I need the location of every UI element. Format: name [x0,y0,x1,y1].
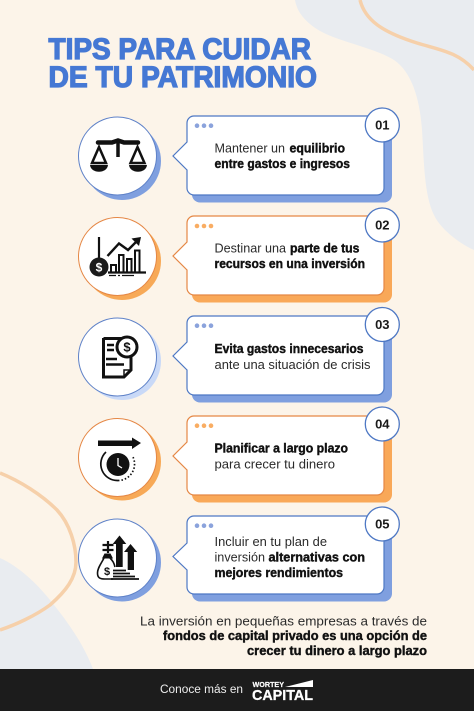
closing statement: fondos de capital privado es una opción de [163,629,427,643]
tip 5 [78,507,399,602]
title [48,33,317,94]
tip 3 text: ante una situación de crisis [214,358,370,372]
tip 2 text [214,242,365,271]
footer bar [0,669,474,711]
speech bubble 5 [173,516,392,602]
number badge 04 [365,407,399,441]
number badge 05 [365,507,399,541]
closing statement: crecer tu dinero a largo plazo [247,644,427,658]
tip 3 [78,308,399,402]
speech bubble 4 [173,416,392,502]
tip 1 text: entre gastos e ingresos [214,157,350,171]
closing statement [140,614,427,658]
speech bubble 1 [173,116,392,202]
tip 5 text: inversión [214,550,265,564]
tip 5 text [214,535,365,580]
number badge 05: 05 [375,516,390,532]
call to action: Conoce más en [160,684,243,696]
tip 1 text: equilibrio [290,142,345,156]
title: DE TU PATRIMONIO [48,61,317,94]
tip 1 [78,108,399,202]
number badge 02 [365,208,399,242]
icon: invoice with coin: $ [123,340,131,354]
number badge 01 [365,108,399,142]
icon: invoice with coin [78,318,161,400]
speech bubble 2 [173,216,392,302]
tip 5 text: alternativas con [268,550,365,564]
tip 1 text: Mantener un [214,142,285,156]
closing statement: La inversión en pequeñas empresas a través de [140,614,427,628]
icon: money bag and rising arrows: $ [104,566,110,578]
logo: Wortey Capital: CAPITAL [252,687,313,704]
tip 4 [78,407,399,502]
number badge 01: 01 [375,118,390,132]
tip 1 text [214,142,350,171]
icon: arrow and clock [78,418,161,500]
tip 5 text: mejores rendimientos [214,566,343,580]
tip 2 text: recursos en una inversión [214,257,365,271]
icon: growth chart with coin: $ [96,260,103,274]
speech bubble 3 [173,316,392,402]
tip 3 text [214,342,370,372]
number badge 03: 03 [375,317,390,332]
tip 3 text: Evita gastos innecesarios [214,342,364,356]
number badge 04: 04 [375,416,390,432]
tip 2 text: Destinar una [214,242,286,256]
number badge 02: 02 [375,218,390,232]
tip 4 text [214,442,348,472]
tip 2 [78,208,399,302]
title: TIPS PARA CUIDAR [48,33,311,66]
tip 5 text: Incluir en tu plan de [214,535,327,549]
icon: money bag and rising arrows [78,519,161,602]
logo: Wortey Capital [252,680,313,704]
number badge 03 [365,308,399,342]
logo: Wortey Capital: WORTEY [252,682,284,689]
tip 4 text: Planificar a largo plazo [214,442,348,456]
icon: growth chart with coin [78,218,161,300]
tip 2 text: parte de tus [290,242,360,256]
tip 4 text: para crecer tu dinero [214,458,335,472]
icon: balance scale [78,117,161,200]
